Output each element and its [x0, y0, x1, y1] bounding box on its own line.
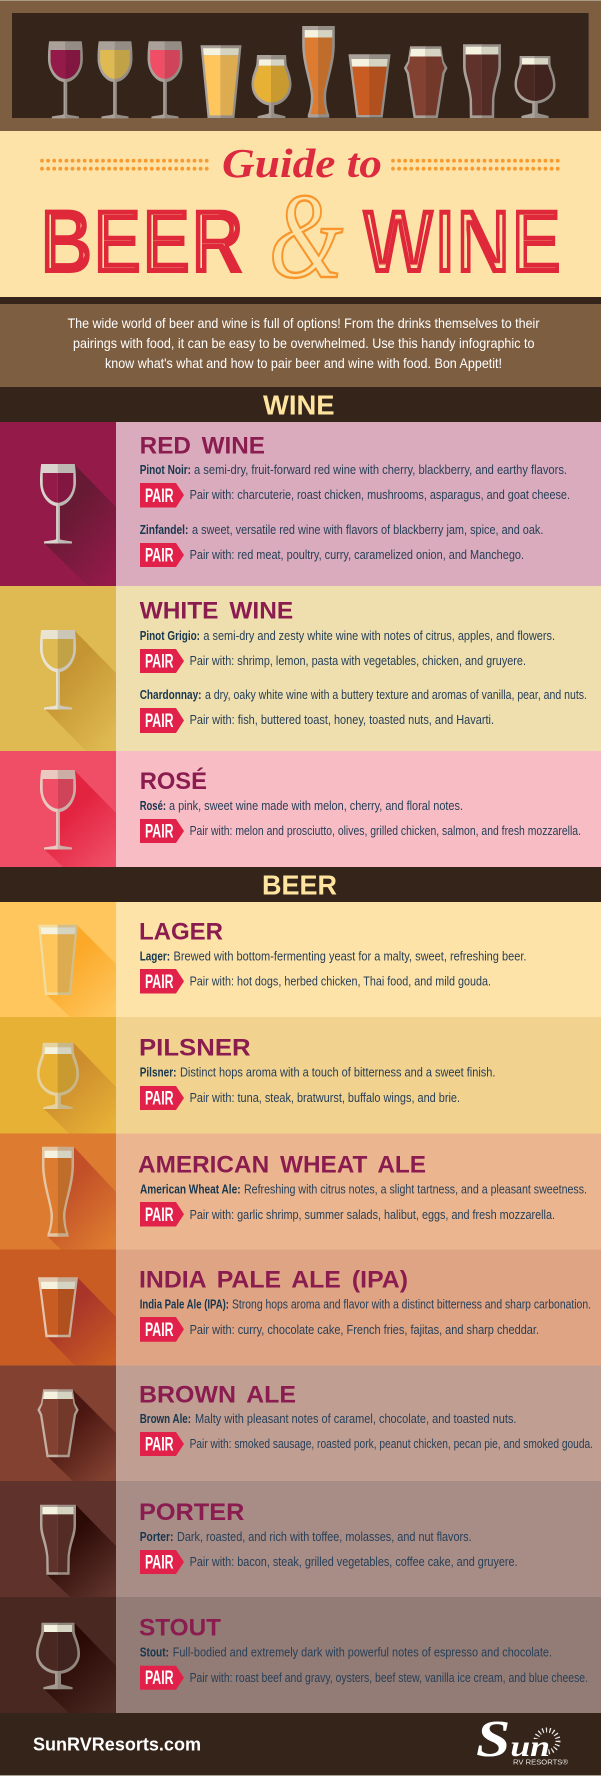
heading: PORTER — [139, 1499, 244, 1526]
panel: footer — [0, 1711, 601, 1776]
icon: stout glass — [515, 56, 555, 118]
heading: BEER: BEER — [40, 191, 244, 293]
icon: red wine glass — [48, 41, 83, 118]
badge: pair — [140, 483, 184, 508]
heading: INDIA PALE ALE (IPA) — [139, 1267, 408, 1294]
badge: pair: PAIR — [145, 652, 174, 672]
dotted rule left — [42, 161, 211, 169]
panel: american wheat ale — [0, 1134, 601, 1250]
text: Pilsner description: Pilsner: — [140, 1066, 176, 1080]
text: intro line 3: know what's what and how to pair beer and wine with food. Bon Appetit! — [105, 355, 502, 371]
icon: wine glass — [40, 464, 76, 544]
text: Chardonnay: Chardonnay: — [140, 688, 202, 702]
text: Brown ale description: Malty with pleasant notes of caramel, chocolate, and toasted nuts. — [195, 1412, 516, 1426]
badge: pair: PAIR — [145, 972, 174, 993]
heading: STOUT — [139, 1614, 221, 1641]
heading: WINE: WINE — [362, 191, 562, 293]
text: IPA description: India Pale Ale (IPA): — [140, 1297, 229, 1311]
text: Rose description: Rosé: — [140, 799, 166, 813]
heading: PILSNER — [139, 1035, 251, 1062]
text: website: SunRVResorts.com — [33, 1734, 201, 1755]
icon: white wine glass — [98, 41, 132, 118]
text: Zinfandel pairing: Pair with: red meat, poultry, curry, caramelized onion, and Manchego. — [190, 548, 524, 562]
text: Lager pairing: Pair with: hot dogs, herbed chicken, Thai food, and mild gouda. — [190, 975, 491, 989]
text: Pinot Noir: a semi-dry, fruit-forward red wine with cherry, blackberry, and earthy flavors. — [194, 463, 567, 477]
badge: pair: PAIR — [145, 1552, 174, 1574]
panel: pilsner — [0, 1017, 601, 1134]
icon: nonic glass — [37, 1389, 79, 1457]
heading: BROWN ALE — [139, 1381, 296, 1408]
text: Zinfandel: a sweet, versatile red wine with flavors of blackberry jam, spice, and oak. — [192, 523, 543, 537]
badge: pair: PAIR — [145, 822, 174, 842]
badge: pair: PAIR — [145, 486, 174, 507]
icon: pilsner glass — [252, 55, 291, 118]
dotted rule right — [393, 161, 562, 169]
badge: pair — [140, 708, 184, 733]
icon: wheat ale glass — [302, 26, 335, 118]
panel: glass shelf header — [0, 0, 601, 131]
icon: pint glass — [38, 925, 78, 995]
panel: stout — [0, 1597, 601, 1713]
heading: ROSÉ — [140, 767, 207, 795]
text: Pinot Noir: Pinot Noir: — [140, 463, 191, 477]
heading: WINE section: WINE — [263, 389, 335, 420]
badge: pair: PAIR — [145, 546, 174, 566]
text: Zinfandel: Zinfandel: — [140, 523, 188, 537]
text: Lager description: Lager: — [140, 949, 170, 963]
heading: AMERICAN WHEAT ALE — [138, 1151, 426, 1178]
icon: wine glass — [40, 630, 76, 710]
heading: WHITE WINE — [140, 597, 293, 624]
text: Wheat ale description: American Wheat Ale: — [140, 1182, 241, 1196]
badge: pair: PAIR — [145, 1205, 174, 1226]
text: intro line 2: pairings with food, it can be easy to be overwhelmed. Use this handy infographic to — [73, 335, 535, 351]
heading: RED WINE — [140, 432, 265, 459]
icon: brown ale glass — [404, 46, 448, 118]
text: Chardonnay pairing: Pair with: fish, buttered toast, honey, toasted nuts, and Havarti. — [190, 713, 494, 727]
text: Porter description: Dark, roasted, and rich with toffee, molasses, and nut flavors. — [177, 1530, 472, 1544]
text: Pinot Grigio: Pinot Grigio: — [140, 629, 200, 643]
icon: porter glass — [40, 1505, 76, 1575]
logo: Sun RV Resorts: RV RESORTS® — [513, 1758, 568, 1766]
icon: stout tulip glass — [36, 1623, 80, 1689]
badge: pair: PAIR — [145, 1434, 174, 1456]
panel: title — [0, 131, 601, 304]
badge: pair: PAIR — [145, 1668, 174, 1689]
icon: porter glass — [463, 44, 501, 118]
badge: pair: PAIR — [145, 1320, 174, 1341]
text: Stout description: Stout: — [140, 1645, 169, 1659]
icon: ipa glass — [348, 54, 391, 118]
text: Brown ale description: Brown Ale: — [140, 1412, 191, 1426]
panel: lager — [0, 902, 601, 1017]
text: IPA pairing: Pair with: curry, chocolate cake, French fries, fajitas, and sharp cheddar. — [190, 1323, 539, 1337]
icon: rose glass — [148, 41, 182, 118]
heading: LAGER — [139, 918, 223, 945]
text: Pinot Grigio pairing: Pair with: shrimp, lemon, pasta with vegetables, chicken, and gruyere. — [190, 654, 526, 668]
icon: pint glass — [38, 1277, 78, 1337]
heading: Guide to: Guide to — [222, 140, 382, 186]
text: intro line 1: The wide world of beer and wine is full of options! From the drinks themselves to their — [68, 315, 540, 331]
text: Pinot Grigio: a semi-dry and zesty white wine with notes of citrus, apples, and flowers. — [203, 629, 555, 643]
panel: rose — [0, 751, 601, 867]
badge: pair: PAIR — [145, 711, 174, 732]
text: Rose description: a pink, sweet wine made with melon, cherry, and floral notes. — [169, 799, 463, 813]
panel: brown ale — [0, 1366, 601, 1481]
logo: Sun RV Resorts: Sun — [476, 1711, 550, 1768]
badge: pair — [140, 969, 184, 994]
icon: wine glass — [40, 770, 76, 850]
icon: lager glass — [201, 45, 241, 118]
text: Wheat ale pairing: Pair with: garlic shrimp, summer salads, halibut, eggs, and fresh mozzarella. — [190, 1208, 555, 1222]
heading: ampersand: & — [269, 169, 343, 304]
panel: india pale ale — [0, 1250, 601, 1366]
text: Porter description: Porter: — [140, 1530, 173, 1544]
text: Porter pairing: Pair with: bacon, steak, grilled vegetables, coffee cake, and gruyere. — [190, 1555, 518, 1569]
badge: pair — [140, 1202, 184, 1226]
panel: white wine — [0, 586, 601, 751]
heading: BEER section: BEER — [262, 869, 337, 900]
panel: introduction — [0, 304, 601, 387]
text: Pilsner description: Distinct hops aroma with a touch of bitterness and a sweet finish. — [180, 1066, 495, 1080]
panel: red wine — [0, 422, 601, 586]
badge: pair — [140, 1317, 184, 1342]
panel: porter — [0, 1481, 601, 1597]
icon: tulip glass — [37, 1043, 79, 1109]
glass row: all ten drinks — [48, 26, 555, 118]
badge: pair: PAIR — [145, 1088, 174, 1110]
text: Lager description: Brewed with bottom-fermenting yeast for a malty, sweet, refreshing beer. — [174, 949, 526, 963]
text: Stout description: Full-bodied and extremely dark with powerful notes of espresso and chocolate. — [173, 1645, 552, 1659]
text: Pilsner pairing: Pair with: tuna, steak, bratwurst, buffalo wings, and brie. — [190, 1091, 460, 1105]
icon: tall wheat glass — [42, 1147, 74, 1237]
